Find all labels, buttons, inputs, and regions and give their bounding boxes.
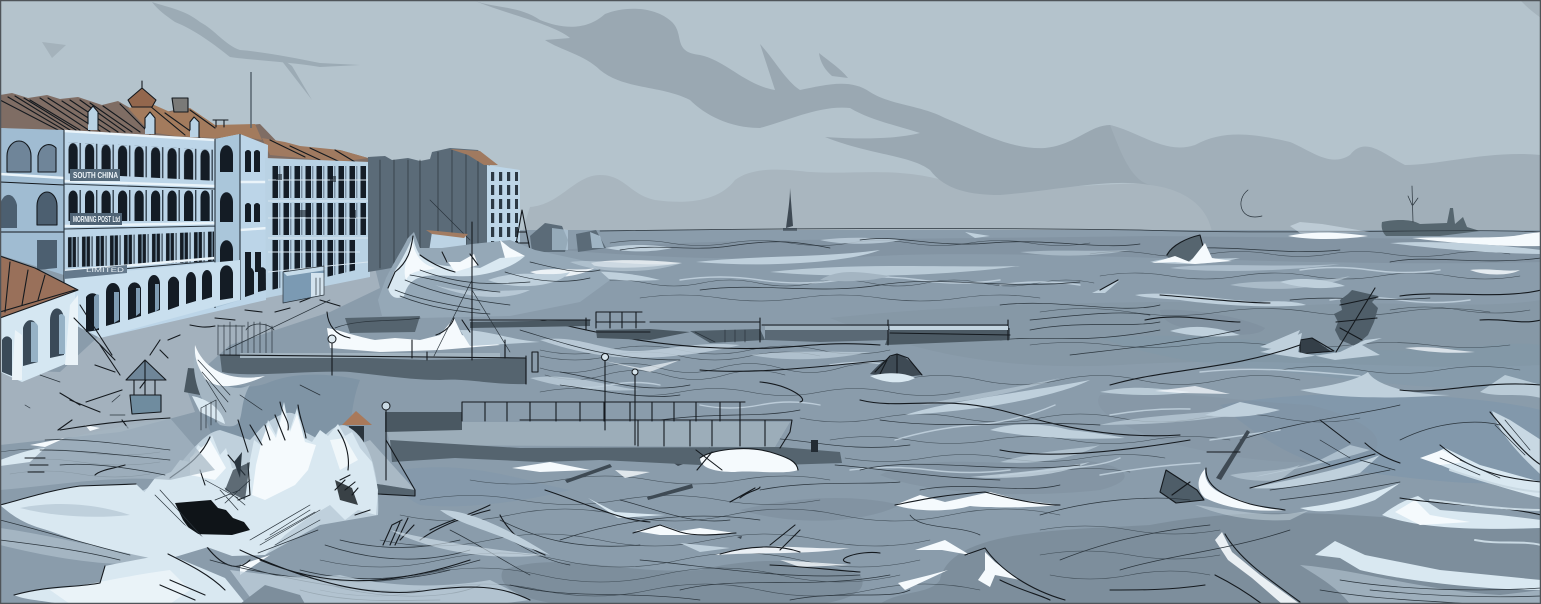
bollard	[811, 440, 818, 452]
foam at far pier	[327, 312, 540, 352]
sign: Lower frieze: LIMITED	[86, 268, 125, 274]
wall	[0, 290, 75, 382]
big wave behind seawall	[378, 232, 682, 318]
main facade window rows	[66, 142, 261, 272]
triangular pier end	[342, 402, 415, 496]
sky	[0, 0, 1541, 240]
far waves	[580, 222, 1541, 353]
lamps	[605, 358, 635, 445]
arches	[2, 308, 64, 376]
bottom dark lines	[240, 550, 530, 600]
left wing facade	[0, 128, 64, 275]
sign: Morning Post: MORNING POST Ltd	[73, 215, 120, 224]
foam on pier	[700, 449, 798, 472]
buildings waterfront	[0, 72, 606, 338]
street debris	[25, 298, 340, 430]
far shed	[530, 223, 568, 252]
sinking wreck	[1160, 430, 1310, 520]
junk wreck	[1260, 288, 1382, 360]
mid pier	[184, 222, 538, 400]
cloud: horizon bank	[522, 170, 1230, 232]
rail front	[520, 420, 792, 448]
foreground sea foam	[0, 418, 550, 604]
far roof	[450, 149, 498, 165]
main splash	[135, 402, 378, 575]
sign: South China: SOUTH CHINA	[73, 171, 118, 180]
iron fence	[218, 300, 330, 355]
near pier	[385, 354, 842, 478]
roof	[0, 256, 78, 318]
cloud: right bank	[1110, 125, 1541, 232]
distant sailboat	[783, 188, 797, 231]
large wave in foreground	[192, 345, 360, 480]
mid waves	[500, 313, 1300, 600]
sign: Lower frieze	[64, 265, 127, 279]
dark stepped block	[175, 500, 250, 535]
rail back	[462, 402, 745, 421]
cloud: long dark plume	[475, 1, 1170, 195]
spare seawall fence	[201, 400, 216, 430]
cupola	[128, 88, 156, 107]
right waves	[1100, 372, 1541, 545]
sea tone bands	[396, 236, 1541, 604]
sign: Morning Post	[70, 213, 122, 225]
kiosk	[342, 411, 372, 425]
pier wall	[220, 355, 526, 384]
scaffold	[515, 210, 530, 250]
clouds	[42, 0, 1541, 232]
ground: flooded street	[0, 268, 380, 445]
far building side	[487, 165, 520, 250]
end wall left	[184, 368, 216, 395]
rock in the sea	[870, 354, 922, 382]
sea base	[0, 230, 1541, 604]
fine swell lines across sea	[0, 240, 1530, 596]
debris: floating timbers	[565, 447, 742, 539]
facade ledges	[0, 131, 268, 271]
distant steamship	[1382, 186, 1480, 236]
lamp post	[331, 342, 333, 400]
second building	[265, 158, 370, 298]
wall	[390, 440, 842, 465]
gazebo on the street	[126, 360, 166, 414]
lower right swells	[1060, 525, 1541, 604]
foreground building	[0, 256, 115, 382]
ink strokes around splash	[210, 505, 570, 601]
far pier	[335, 312, 1010, 345]
dormers	[88, 106, 199, 137]
splash ink	[143, 402, 348, 566]
cloud: upper left wisp	[152, 2, 360, 67]
chimneys	[172, 98, 188, 112]
left wing windows	[0, 141, 64, 270]
dark wall	[368, 148, 490, 272]
sinking boat, far	[1152, 235, 1232, 264]
main facade	[64, 130, 268, 338]
tower	[215, 134, 240, 308]
small kiosk	[428, 232, 466, 258]
sign: South China	[70, 169, 120, 181]
pier posts	[412, 340, 538, 384]
deck	[385, 422, 790, 447]
roof: main building	[0, 93, 368, 170]
pole	[472, 222, 505, 360]
roof lines	[0, 96, 360, 165]
ground floor arcade	[64, 260, 266, 338]
antenna	[250, 72, 252, 128]
blue kiosk on street	[283, 266, 324, 303]
